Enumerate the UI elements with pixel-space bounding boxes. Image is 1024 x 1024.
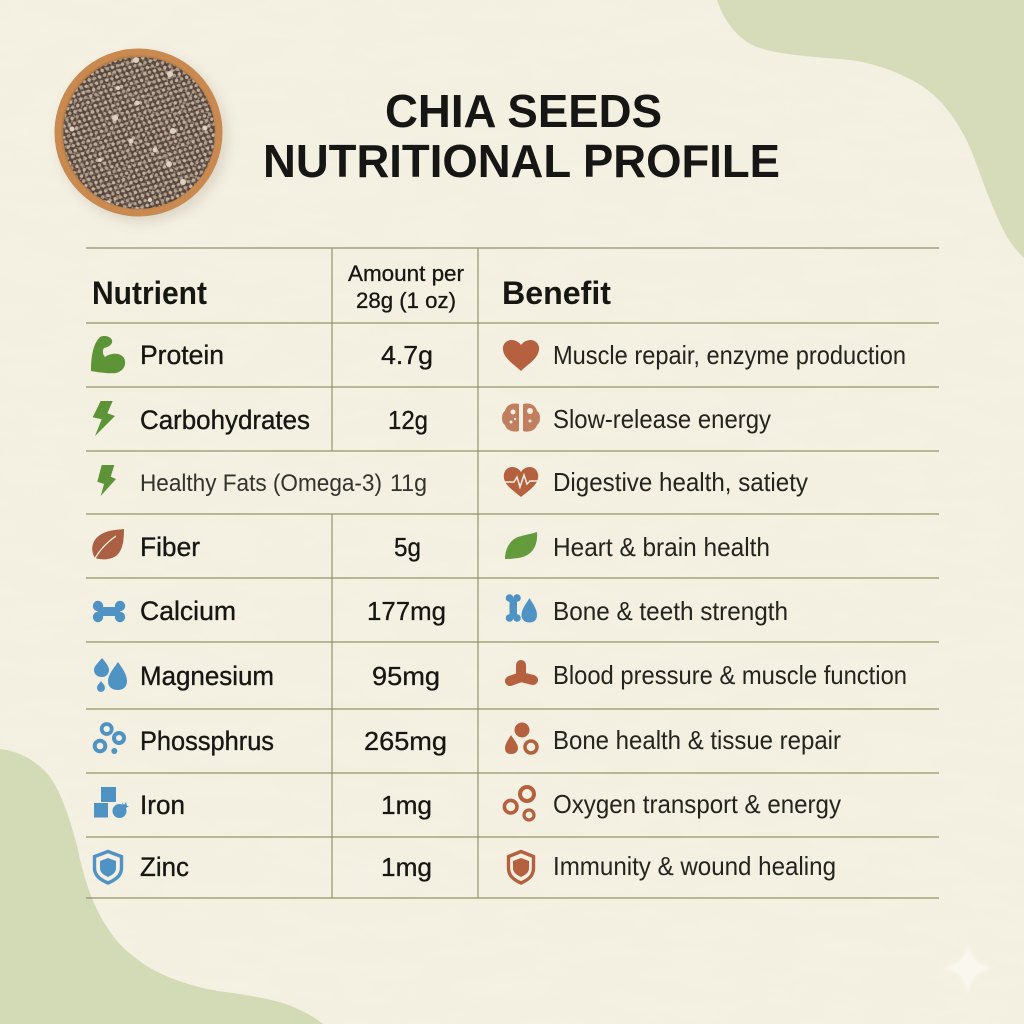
- table header: Nutrient: [92, 275, 207, 311]
- title: NUTRITIONAL PROFILE: [263, 135, 780, 187]
- row: calcium: Bone & teeth strength: [553, 596, 788, 626]
- row: calcium: Calcium: [140, 596, 236, 626]
- row: magnesium: 95mg: [372, 661, 440, 691]
- row: protein: 4.7g: [381, 340, 433, 370]
- row: magnesium: Blood pressure & muscle function: [553, 660, 907, 690]
- icon: sparkle watermark: [942, 942, 994, 994]
- title: [263, 85, 780, 187]
- row: healthy fats: [97, 465, 808, 497]
- chia seed bowl: [54, 48, 227, 222]
- title: CHIA SEEDS: [385, 85, 662, 137]
- row: carbohydrates: 12g: [388, 405, 428, 435]
- row: iron: 1mg: [381, 790, 432, 820]
- row: healthy fats: 11g: [390, 470, 427, 497]
- row: calcium: 177mg: [367, 596, 446, 626]
- row: calcium: [93, 594, 788, 626]
- row: fiber: Heart & brain health: [553, 532, 770, 562]
- row: healthy fats: Digestive health, satiety: [553, 467, 808, 497]
- row: zinc: [94, 851, 836, 883]
- row: carbohydrates: Carbohydrates: [140, 405, 310, 435]
- row: phosphorus: 265mg: [364, 726, 447, 756]
- table header: [92, 261, 611, 313]
- row: iron: [94, 787, 841, 820]
- row: phosphorus: [95, 722, 841, 756]
- row: phosphorus: Phossphrus: [140, 726, 274, 756]
- table grid: [86, 248, 939, 898]
- row: zinc: 1mg: [381, 852, 432, 882]
- row: iron: Oxygen transport & energy: [553, 789, 841, 819]
- decorative blob: bottom left: [0, 749, 323, 1024]
- table header: 28g (1 oz): [356, 288, 456, 313]
- table header: Benefit: [502, 275, 611, 311]
- row: carbohydrates: Slow-release energy: [553, 404, 771, 434]
- row: fiber: [92, 529, 770, 562]
- row: carbohydrates: [93, 401, 771, 436]
- row: protein: Protein: [140, 340, 224, 370]
- row: iron: Iron: [140, 790, 185, 820]
- row: zinc: Zinc: [140, 852, 189, 882]
- table header: Amount per: [348, 261, 464, 286]
- row: protein: Muscle repair, enzyme production: [553, 340, 906, 370]
- row: protein: [91, 336, 906, 373]
- row: healthy fats: Healthy Fats (Omega-3): [140, 470, 382, 497]
- row: fiber: 5g: [394, 532, 421, 562]
- row: magnesium: Magnesium: [140, 661, 274, 691]
- row: fiber: Fiber: [140, 532, 200, 562]
- row: zinc: Immunity & wound healing: [553, 851, 836, 881]
- row: phosphorus: Bone health & tissue repair: [553, 725, 841, 755]
- decorative blob: top right: [717, 0, 1024, 258]
- row: magnesium: [94, 658, 907, 692]
